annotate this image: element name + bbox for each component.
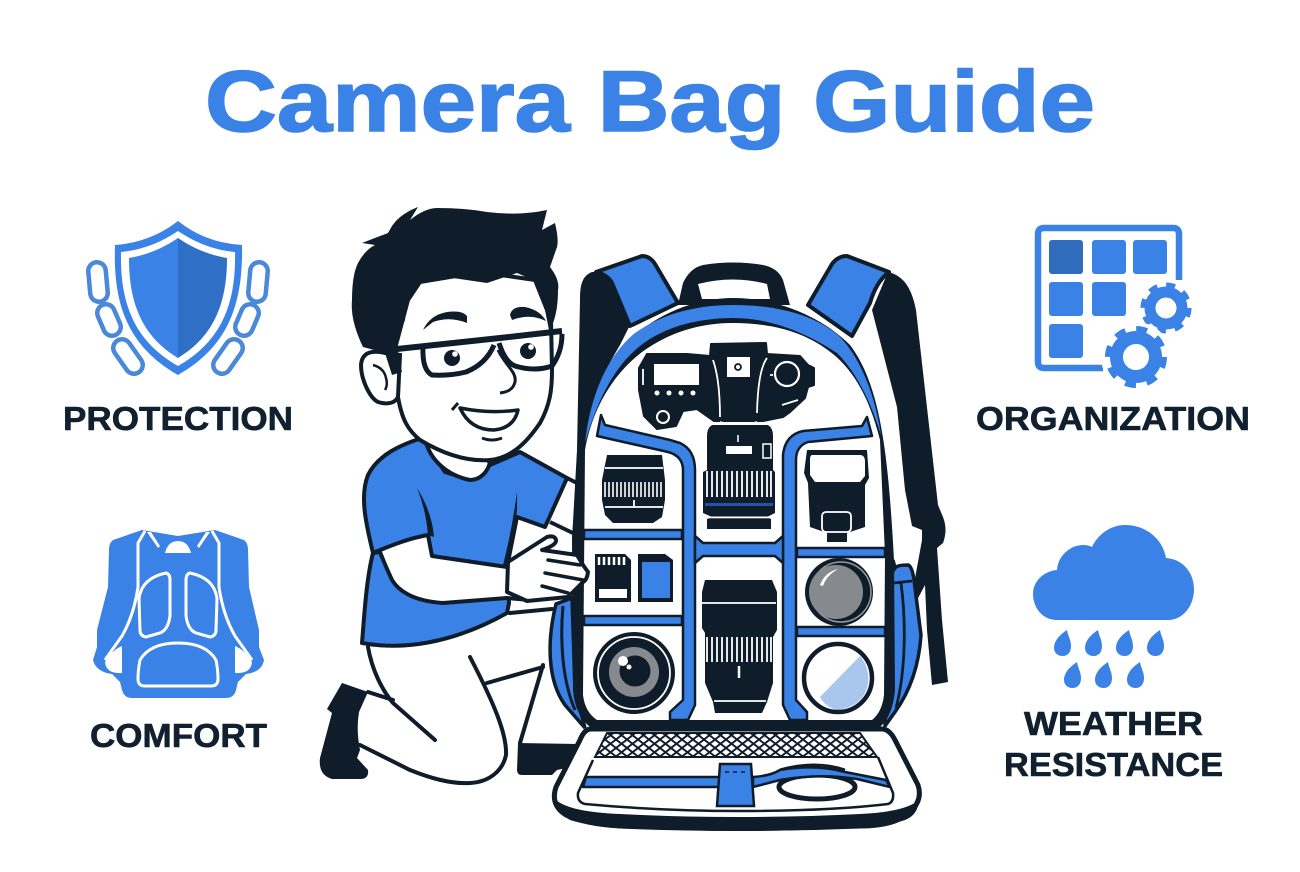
person: cheek and chin marks: [452, 403, 502, 440]
person: shirt folds: [417, 488, 517, 565]
telephoto lens: [702, 580, 777, 713]
label: comfort: COMFORT: [90, 717, 267, 754]
clear lens filter: [804, 644, 872, 712]
person: strap lines near shirt: [550, 478, 577, 534]
label: organization: ORGANIZATION: [976, 400, 1250, 437]
label: weather resistance: RESISTANCE: [1004, 746, 1223, 783]
label: weather resistance: [1004, 705, 1223, 783]
backpack: blue dividers: [584, 415, 885, 720]
grey lens filter: [805, 558, 873, 626]
backpack: outer shell: [572, 298, 895, 727]
person: arm: [373, 535, 530, 603]
person: trousers and legs: [360, 609, 552, 783]
person: kneeling photographer: [320, 207, 580, 783]
person: hair: [352, 207, 558, 375]
flash unit: [804, 450, 869, 542]
label: protection: PROTECTION: [63, 400, 293, 437]
backpack: handle: [678, 262, 790, 305]
backpack: left strap: [572, 272, 630, 540]
title: Camera Bag Guide: [205, 54, 1095, 150]
person: eyebrows: [423, 307, 546, 330]
flap: ring: [779, 765, 855, 799]
person: left shoe: [320, 683, 368, 779]
backpack: right strap blue: [808, 256, 889, 336]
icon: comfort backpack: [93, 530, 264, 698]
person: smiling mouth: [460, 408, 518, 430]
backpack: open bottom flap: [554, 729, 919, 831]
person: ear: [361, 352, 400, 403]
front lens circle: [593, 632, 675, 714]
person: hand on backpack: [507, 536, 588, 601]
person: eyes: [444, 343, 536, 366]
person: right shoe: [517, 743, 580, 775]
person: nose: [498, 350, 515, 393]
backpack: left strap blue: [596, 256, 678, 326]
person: neck: [426, 440, 490, 480]
flap: blue strap: [583, 767, 890, 787]
backpack: side pockets: [550, 560, 921, 728]
SD memory cards: [595, 554, 673, 602]
flap: blue tab: [717, 764, 754, 806]
backpack: blue top band: [585, 305, 881, 443]
person: blue t-shirt: [362, 438, 567, 646]
short prime lens: [602, 455, 665, 523]
kit lens under camera: [703, 425, 775, 529]
backpack: right strap: [872, 272, 948, 685]
label: weather resistance: WEATHER: [1024, 705, 1203, 742]
backpack: [550, 256, 948, 831]
person: face: [396, 272, 552, 460]
icon: organization grid with gears: [1038, 228, 1195, 392]
icon: protection shield: [97, 221, 259, 375]
camera body: [639, 343, 814, 429]
backpack: white interior: [583, 323, 885, 720]
flap: mesh pocket: [595, 733, 877, 757]
icon: rain cloud: [1033, 525, 1194, 688]
person: glasses: [397, 331, 562, 375]
